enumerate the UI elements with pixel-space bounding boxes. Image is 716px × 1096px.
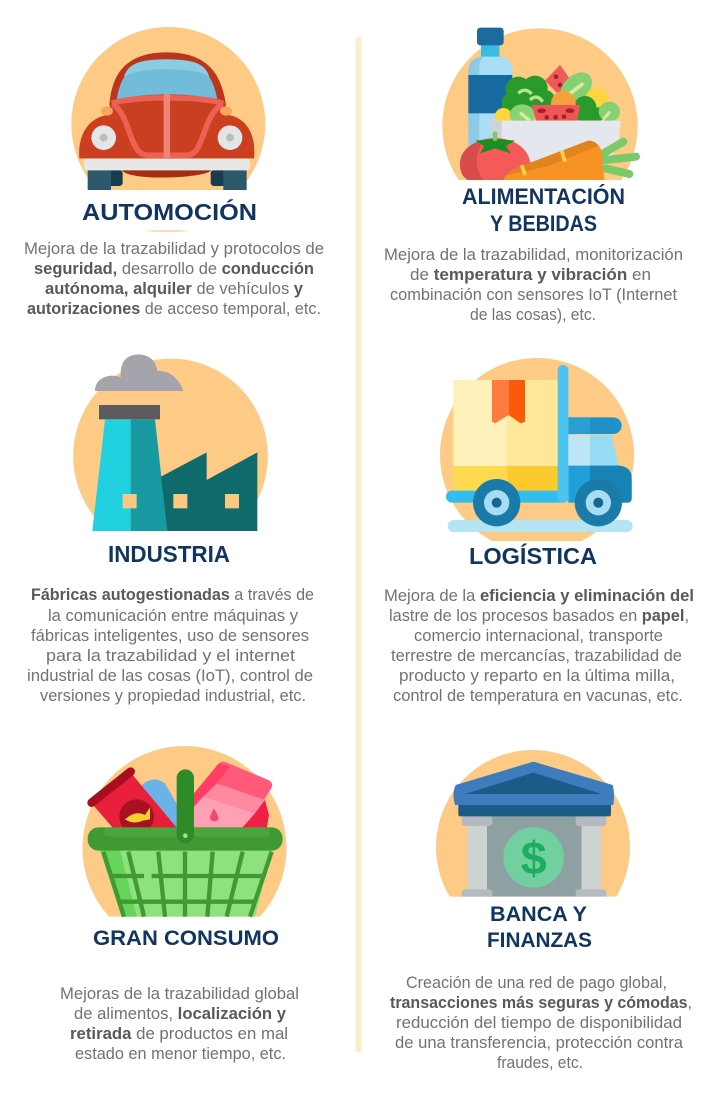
text: gran consumo: de alimentos, localización y [74,1005,287,1023]
icon: basket [82,746,286,918]
heading: alimentación y bebidas [462,184,625,236]
panel: industria [27,354,314,705]
text: gran consumo: Mejoras de la trazabilidad global [60,985,299,1003]
text: industria: Fábricas autogestionadas a través de [31,586,314,604]
text: industria: industrial de las cosas (IoT), control de [27,667,313,685]
heading: logística: LOGÍSTICA [469,542,597,569]
text: industria: fábricas inteligentes, uso de sensores [31,627,309,645]
text: logística: control de temperatura en vacunas, etc. [393,687,683,705]
text: industria [27,586,314,705]
icon: food [442,28,640,180]
text: alimentación y bebidas [384,246,683,324]
text: industria: versiones y propiedad industrial, etc. [40,687,306,705]
icon: bank: $ [521,832,547,884]
text: alimentación y bebidas: combinación con sensores IoT (Internet [390,286,677,304]
text: logística: Mejora de la eficiencia y eliminación del [384,587,694,605]
text: alimentación y bebidas: de temperatura y vibración en [410,266,651,284]
text: gran consumo: estado en menor tiempo, etc. [75,1045,286,1063]
text: gran consumo: retirada de productos en mal [70,1025,288,1043]
text: logística: producto y reparto en la última milla, [399,667,675,685]
icon: factory [73,354,268,531]
panel: logística [384,358,694,705]
heading: alimentación y bebidas: Y BEBIDAS [490,211,597,236]
panel: automoción [24,27,324,318]
heading: industria: INDUSTRIA [108,541,230,567]
text: banca y finanzas: transacciones más seguras y cómodas, [390,994,692,1012]
heading: banca y finanzas: FINANZAS [487,929,592,952]
text: industria: para la trazabilidad y el internet [46,647,295,665]
heading: banca y finanzas: BANCA Y [490,903,587,926]
text: banca y finanzas: Creación de una red de pago global, [406,974,667,992]
icon: truck [440,358,634,552]
text: logística: lastre de los procesos basados en papel, [389,607,689,625]
text: automoción: autónoma, alquiler de vehículos y [45,280,304,298]
text: industria: la comunicación entre máquinas y [48,607,299,625]
text: alimentación y bebidas: de las cosas), etc. [470,306,596,324]
heading: gran consumo: GRAN CONSUMO [93,927,279,950]
text: automoción: Mejora de la trazabilidad y protocolos de [24,240,324,258]
text: logística: terrestre de mercancías, trazabilidad de [391,647,682,665]
text: banca y finanzas [390,974,692,1072]
text: logística [384,587,694,705]
center divider [356,37,362,1052]
icon: car [71,27,266,190]
heading: alimentación y bebidas: ALIMENTACIÓN [462,184,625,209]
text: automoción: seguridad, desarrollo de conducción [34,260,314,278]
text: logística: comercio internacional, transporte [414,627,663,645]
text: alimentación y bebidas: Mejora de la trazabilidad, monitorización [384,246,683,264]
text: banca y finanzas: de una transferencia, protección contra [395,1034,684,1052]
panel: alimentación y bebidas [384,28,683,324]
panel: gran consumo [60,746,299,1063]
text: gran consumo [60,985,299,1063]
panel: banca y finanzas [390,750,692,1072]
text: automoción [24,240,324,318]
heading: banca y finanzas [487,903,592,952]
heading: automoción: AUTOMOCIÓN [82,198,257,225]
text: automoción: autorizaciones de acceso temporal, etc. [27,300,321,318]
text: banca y finanzas: fraudes, etc. [497,1054,583,1072]
icon: bank [436,750,630,897]
text: banca y finanzas: reducción del tiempo de disponibilidad [396,1014,682,1032]
